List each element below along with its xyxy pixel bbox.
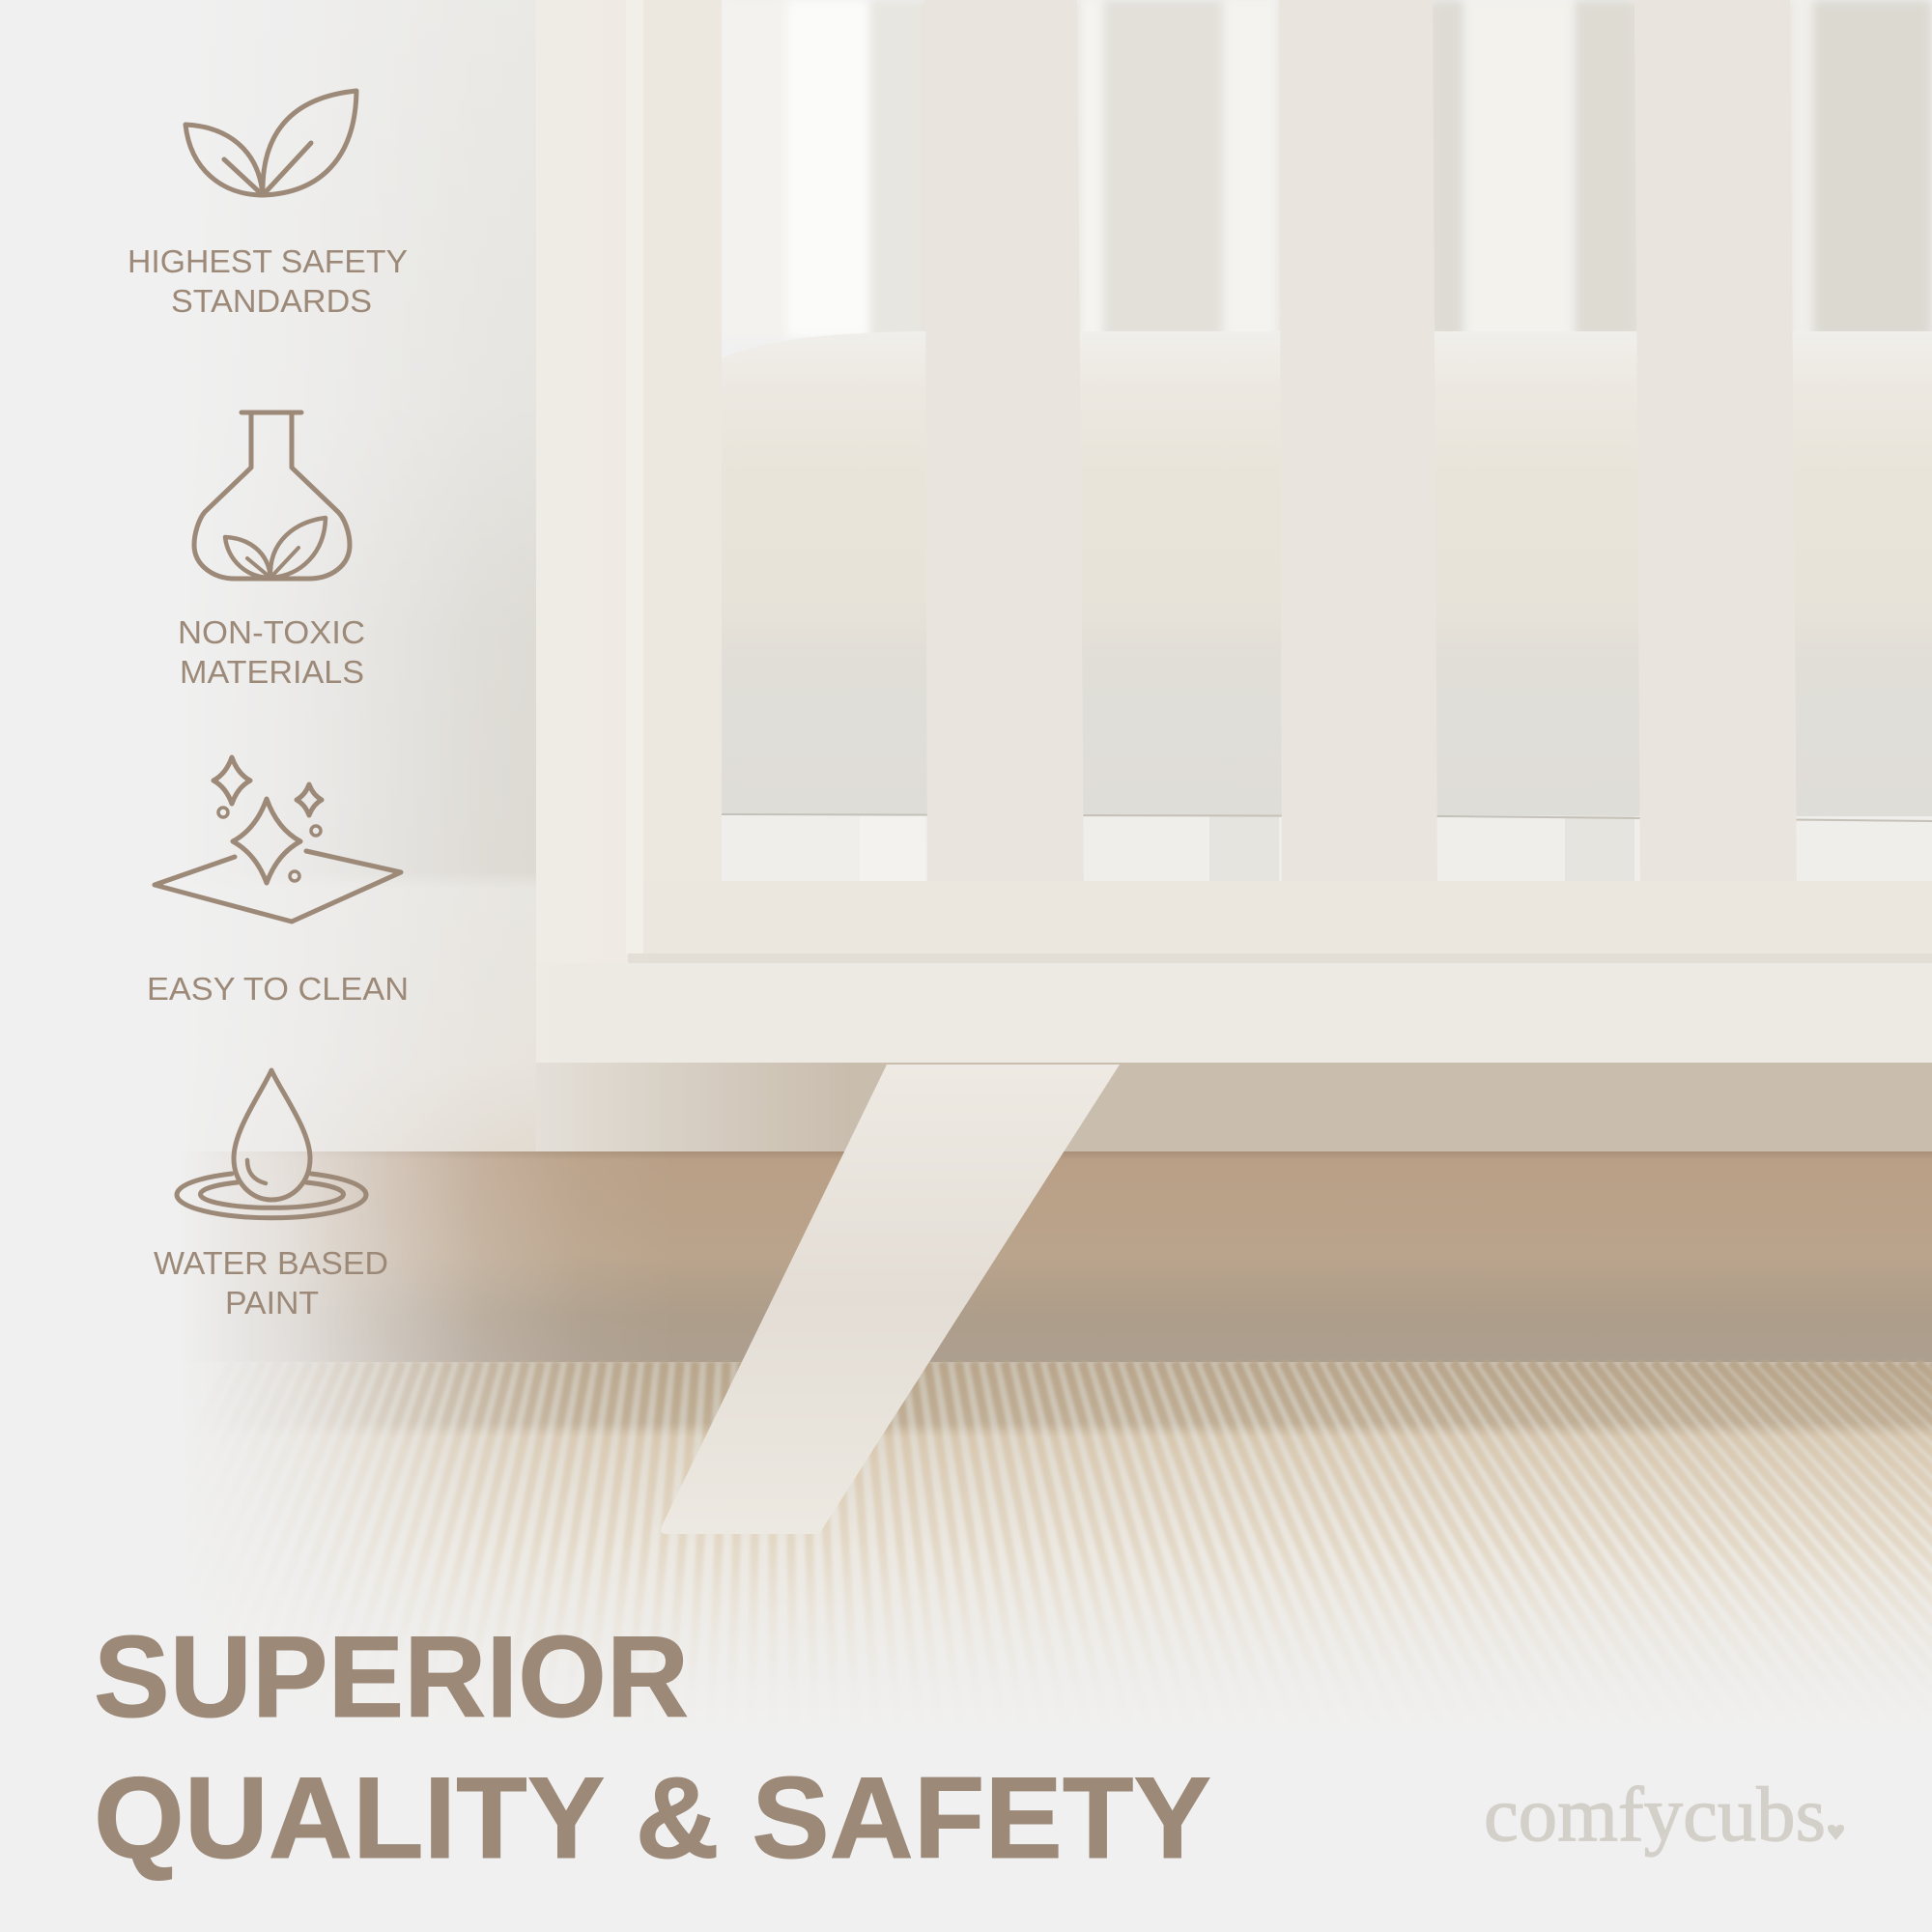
feature: water based paint <box>154 1070 388 1321</box>
title <box>94 1612 1211 1883</box>
icon: sparkling surface <box>155 757 401 922</box>
icon: flask with leaves <box>194 412 350 579</box>
label: water based paint: WATER BASED <box>154 1245 388 1281</box>
fade overlay left <box>0 0 676 1932</box>
label: non-toxic materials <box>178 614 365 690</box>
fade overlay bottom <box>0 1439 1932 1932</box>
label: highest safety standards: STANDARDS <box>171 283 372 319</box>
feature: non-toxic materials <box>178 412 365 690</box>
wall under crib <box>536 1061 1932 1157</box>
view through the slats <box>720 0 1932 338</box>
label: water based paint <box>154 1245 388 1321</box>
wall behind crib <box>0 0 541 1154</box>
crib frame <box>536 0 1932 1063</box>
crib leg <box>661 1065 1120 1534</box>
label: easy to clean: EASY TO CLEAN <box>147 971 409 1007</box>
feature: highest safety standards <box>128 91 408 319</box>
title: QUALITY & SAFETY <box>94 1753 1211 1883</box>
strip under mattress <box>722 814 1932 884</box>
label: non-toxic materials: MATERIALS <box>180 654 364 690</box>
brand logo: comfycubs <box>1484 1773 1826 1858</box>
label: non-toxic materials: NON-TOXIC <box>178 614 365 650</box>
icon: heart <box>1828 1825 1844 1840</box>
mattress <box>720 331 1932 821</box>
icon: leaves <box>185 91 356 195</box>
icon: water drop with ripples <box>177 1070 366 1218</box>
feature: easy to clean <box>147 757 409 1007</box>
label: highest safety standards <box>128 243 408 319</box>
rug <box>0 1362 1932 1932</box>
title: SUPERIOR <box>94 1612 689 1742</box>
label: highest safety standards: HIGHEST SAFETY <box>128 243 408 279</box>
label: water based paint: PAINT <box>225 1285 319 1321</box>
wood floor <box>0 1151 1932 1364</box>
slats <box>924 0 1797 881</box>
